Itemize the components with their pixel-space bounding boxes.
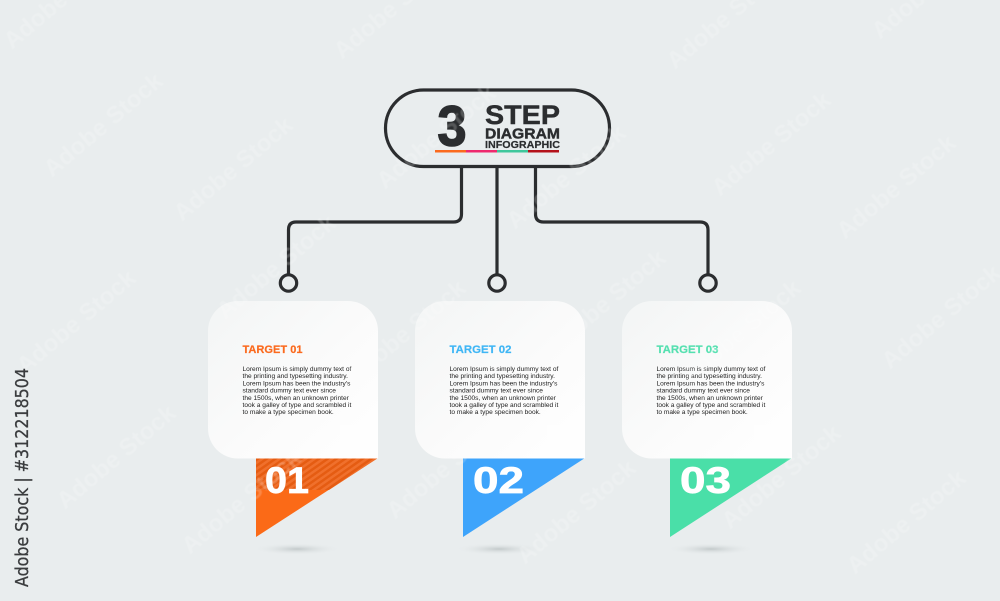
panel: target 03 xyxy=(622,301,792,555)
number: 02 xyxy=(473,460,524,501)
body text: Lorem Ipsum has been the industry's xyxy=(656,380,765,387)
body text: standard dummy text ever since xyxy=(656,388,750,395)
card xyxy=(415,301,585,458)
title word: diagram: DIAGRAM xyxy=(485,126,560,142)
text: Adobe Stock xyxy=(512,454,642,570)
text: Adobe Stock xyxy=(382,409,512,525)
text: Adobe Stock xyxy=(39,67,169,183)
title word: infographic: INFOGRAPHIC xyxy=(485,140,560,151)
text: Adobe Stock xyxy=(717,419,847,535)
body text: the 1500s, when an unknown printer xyxy=(656,395,764,402)
panel: target 02 xyxy=(415,301,585,555)
heading: TARGET 03 xyxy=(656,344,718,356)
card overlap corner xyxy=(547,425,585,458)
heading: TARGET 01 xyxy=(242,344,302,356)
body text: to make a type specimen book. xyxy=(242,409,334,416)
number ribbon xyxy=(670,458,792,537)
text: Adobe Stock xyxy=(502,119,632,235)
body text: Lorem Ipsum is simply dummy text of xyxy=(242,366,351,373)
body text: the printing and typesetting industry. xyxy=(242,373,348,380)
body text: to make a type specimen book. xyxy=(656,409,748,416)
card xyxy=(622,301,792,458)
body text: standard dummy text ever since xyxy=(242,388,336,395)
body text xyxy=(242,366,352,416)
body text: Lorem Ipsum is simply dummy text of xyxy=(450,366,558,373)
ground shadow xyxy=(667,543,755,555)
stock id side label: Adobe Stock | #312218504 xyxy=(12,368,33,587)
text: Adobe Stock xyxy=(169,111,299,227)
colour underline xyxy=(435,150,559,152)
card overlap corner xyxy=(340,425,378,458)
text: Adobe Stock xyxy=(177,444,307,560)
card xyxy=(208,301,378,458)
text: Adobe Stock xyxy=(12,264,142,380)
body text: the 1500s, when an unknown printer xyxy=(450,395,557,402)
body text: standard dummy text ever since xyxy=(450,388,543,395)
ground shadow xyxy=(253,543,341,555)
number ribbon xyxy=(463,458,585,537)
connector lines xyxy=(280,167,716,291)
number: 03 xyxy=(680,460,731,501)
text: Adobe Stock xyxy=(677,274,807,390)
number ribbon xyxy=(256,458,378,537)
body text: took a galley of type and scrambled it xyxy=(450,402,559,409)
body text xyxy=(656,366,766,416)
title word: step: STEP xyxy=(485,100,560,130)
body text: Lorem Ipsum has been the industry's xyxy=(242,380,351,387)
text: Adobe Stock xyxy=(212,209,342,325)
text: Adobe Stock xyxy=(842,464,972,580)
body text: the 1500s, when an unknown printer xyxy=(242,395,350,402)
body text: Lorem Ipsum is simply dummy text of xyxy=(656,366,765,373)
body text xyxy=(450,366,559,416)
ground shadow xyxy=(455,543,543,555)
title number 3: 3 xyxy=(438,94,466,158)
number: 01 xyxy=(265,460,309,501)
body text: the printing and typesetting industry. xyxy=(656,373,762,380)
text: Adobe Stock xyxy=(832,129,962,245)
text: Adobe Stock xyxy=(542,244,672,360)
body text: took a galley of type and scrambled it xyxy=(242,402,352,409)
heading: TARGET 02 xyxy=(450,344,512,356)
text: Adobe Stock xyxy=(342,274,472,390)
text: Adobe Stock xyxy=(52,399,182,515)
body text: the printing and typesetting industry. xyxy=(450,373,555,380)
panel: target 01 xyxy=(208,301,378,555)
text: Adobe Stock xyxy=(707,86,837,202)
body text: Lorem Ipsum has been the industry's xyxy=(450,380,558,387)
title pill xyxy=(386,90,610,166)
body text: to make a type specimen book. xyxy=(450,409,541,416)
body text: took a galley of type and scrambled it xyxy=(656,402,766,409)
card overlap corner xyxy=(754,425,792,458)
text: Adobe Stock xyxy=(372,79,502,195)
